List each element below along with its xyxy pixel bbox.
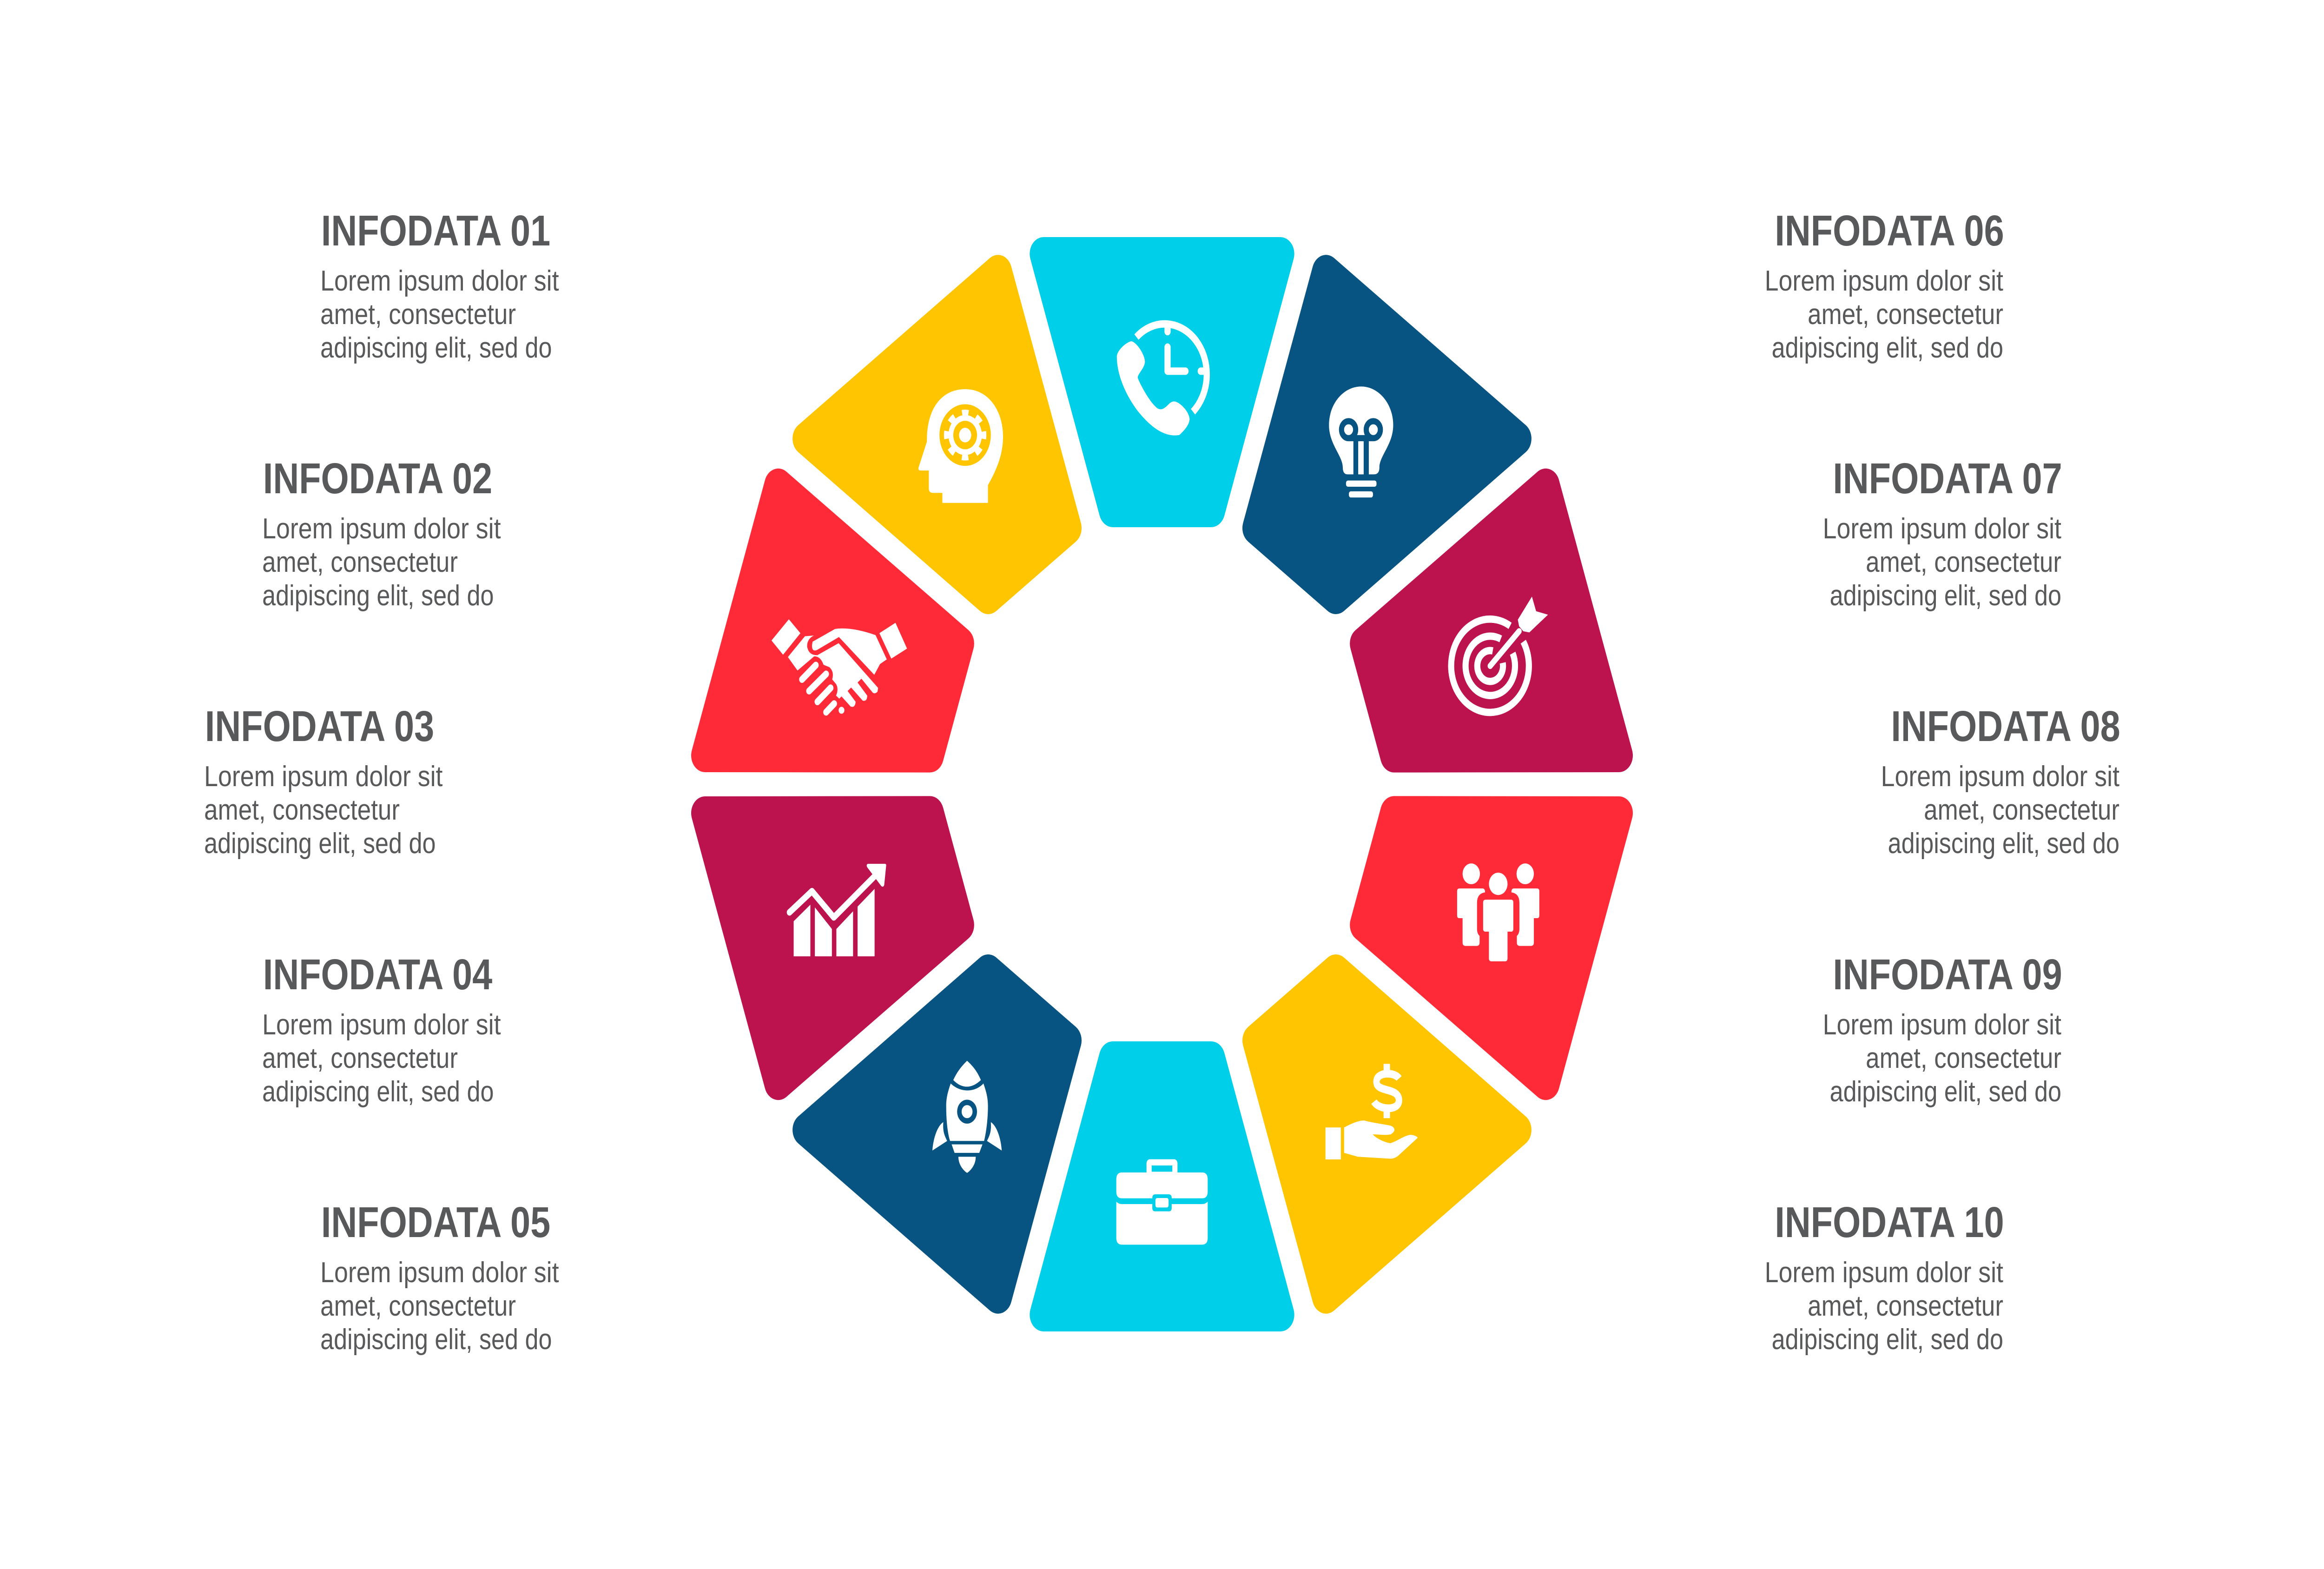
text block: INFODATA 06: INFODATA 06 — [1775, 207, 2004, 255]
text block: INFODATA 03: adipiscing elit, sed do — [204, 828, 436, 860]
text block: INFODATA 06: adipiscing elit, sed do — [1772, 332, 2003, 364]
text block: INFODATA 05: adipiscing elit, sed do — [320, 1324, 552, 1356]
segment: bottom cyan — [1030, 1041, 1294, 1331]
text block: INFODATA 04 — [262, 951, 501, 1108]
text block: INFODATA 06: Lorem ipsum dolor sit — [1765, 265, 2003, 297]
segment: left upper red — [687, 464, 999, 856]
text block: INFODATA 01: INFODATA 01 — [321, 207, 550, 255]
text block: INFODATA 03: INFODATA 03 — [205, 702, 434, 751]
segment: lower-right yellow — [1181, 899, 1537, 1320]
icon: handshake — [772, 619, 907, 714]
icon: head with gear — [918, 389, 1003, 503]
text block: INFODATA 07: Lorem ipsum dolor sit — [1823, 513, 2061, 545]
segment: top cyan — [1030, 237, 1294, 527]
text block: INFODATA 10 — [1765, 1198, 2004, 1356]
text block: INFODATA 07: INFODATA 07 — [1833, 455, 2062, 503]
text block: INFODATA 07: amet, consectetur — [1866, 546, 2061, 578]
text block: INFODATA 09: INFODATA 09 — [1833, 951, 2062, 999]
icon: hand holding dollar — [1326, 1064, 1418, 1159]
text block: INFODATA 08: adipiscing elit, sed do — [1888, 828, 2119, 860]
text block: INFODATA 10: amet, consectetur — [1808, 1290, 2003, 1322]
segment: right upper maroon — [1325, 464, 1637, 856]
icon: target with arrow — [1451, 596, 1548, 712]
text block: INFODATA 04: adipiscing elit, sed do — [262, 1076, 494, 1108]
text block: INFODATA 01: adipiscing elit, sed do — [320, 332, 552, 364]
text block: INFODATA 01: amet, consectetur — [320, 298, 516, 331]
text block: INFODATA 07: adipiscing elit, sed do — [1830, 580, 2061, 612]
icon: light bulb — [1329, 386, 1393, 497]
panel: decagon ring of ten segments — [687, 237, 1637, 1331]
icon: briefcase — [1116, 1162, 1208, 1245]
text block: INFODATA 05: amet, consectetur — [320, 1290, 516, 1322]
text block: INFODATA 09 — [1823, 951, 2062, 1108]
text block: INFODATA 09: Lorem ipsum dolor sit — [1823, 1009, 2061, 1041]
segment: upper-left yellow — [787, 248, 1143, 669]
text block: INFODATA 04: INFODATA 04 — [263, 951, 493, 999]
icon: rocket — [932, 1061, 1002, 1173]
text block: INFODATA 05 — [320, 1198, 559, 1356]
text block: INFODATA 04: amet, consectetur — [262, 1042, 458, 1074]
segment: lower-left blue — [787, 899, 1143, 1320]
text block: INFODATA 07 — [1823, 455, 2062, 612]
text block: INFODATA 02: INFODATA 02 — [263, 455, 492, 503]
text block: INFODATA 08: amet, consectetur — [1924, 794, 2119, 826]
text block: INFODATA 10: adipiscing elit, sed do — [1772, 1324, 2003, 1356]
text block: INFODATA 01: Lorem ipsum dolor sit — [320, 265, 559, 297]
segment: upper-right blue — [1181, 248, 1537, 669]
icon: phone and clock — [1117, 324, 1207, 436]
text block: INFODATA 03: Lorem ipsum dolor sit — [204, 761, 443, 793]
text block: INFODATA 09: adipiscing elit, sed do — [1830, 1076, 2061, 1108]
text block: INFODATA 02: Lorem ipsum dolor sit — [262, 513, 501, 545]
text block: INFODATA 10: INFODATA 10 — [1775, 1198, 2004, 1247]
text block: INFODATA 08: INFODATA 08 — [1891, 702, 2120, 751]
icon: growth chart with arrow — [790, 864, 886, 956]
text block: INFODATA 10: Lorem ipsum dolor sit — [1765, 1257, 2003, 1289]
text block: INFODATA 06 — [1765, 207, 2004, 364]
icon: three people — [1457, 863, 1539, 961]
text block: INFODATA 06: amet, consectetur — [1808, 298, 2003, 331]
segment: right lower red — [1325, 713, 1637, 1105]
text block: INFODATA 05: Lorem ipsum dolor sit — [320, 1257, 559, 1289]
text block: INFODATA 02 — [262, 455, 501, 612]
text block: INFODATA 03 — [204, 702, 443, 860]
text block: INFODATA 02: amet, consectetur — [262, 546, 458, 578]
text block: INFODATA 09: amet, consectetur — [1866, 1042, 2061, 1074]
segment: left lower maroon — [687, 713, 999, 1105]
text block: INFODATA 04: Lorem ipsum dolor sit — [262, 1009, 501, 1041]
text block: INFODATA 08: Lorem ipsum dolor sit — [1881, 761, 2119, 793]
text block: INFODATA 05: INFODATA 05 — [321, 1198, 550, 1247]
text block: INFODATA 02: adipiscing elit, sed do — [262, 580, 494, 612]
text block: INFODATA 01 — [320, 207, 559, 364]
text block: INFODATA 08 — [1881, 702, 2120, 860]
text block: INFODATA 03: amet, consectetur — [204, 794, 400, 826]
